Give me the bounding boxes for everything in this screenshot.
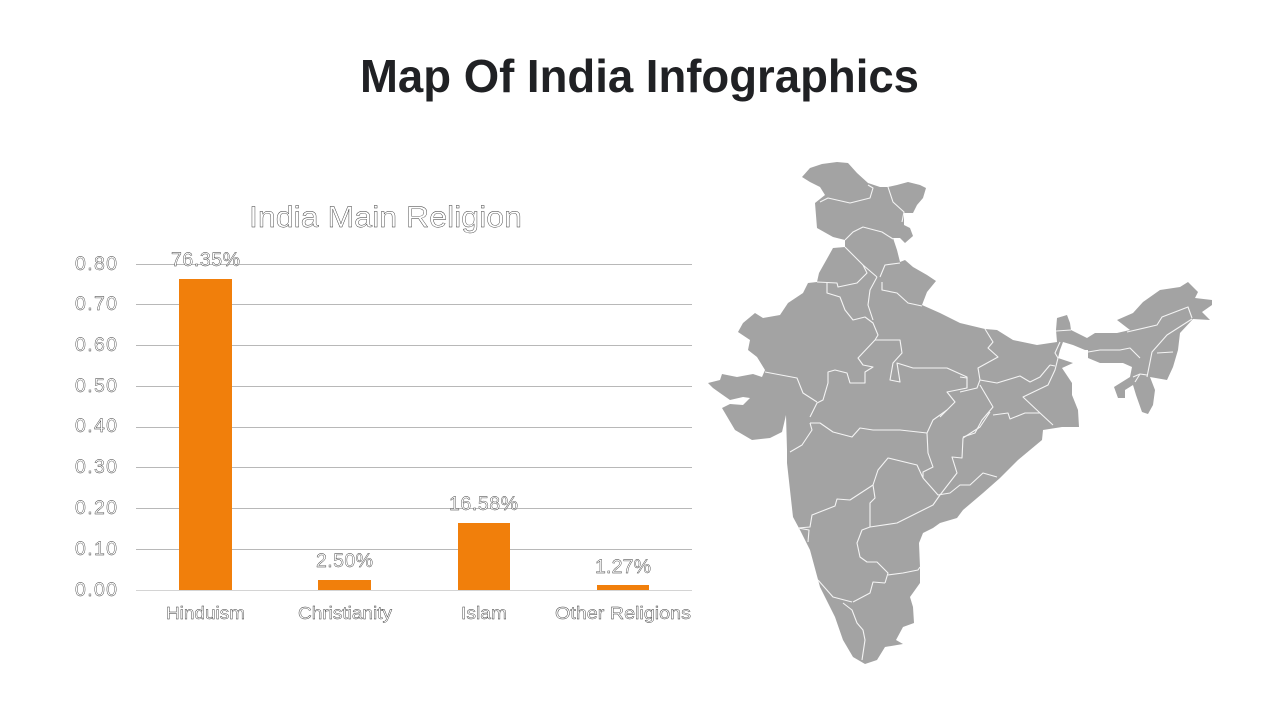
y axis labels: 0.40 bbox=[75, 415, 117, 437]
category labels: Islam bbox=[461, 603, 507, 623]
y axis labels: 0.20 bbox=[75, 497, 117, 519]
title: Map Of India Infographics bbox=[360, 50, 919, 102]
value labels bbox=[171, 249, 651, 578]
bars bbox=[179, 279, 649, 590]
value labels: 76.35% bbox=[171, 249, 240, 271]
chart title: India Main Religion bbox=[249, 201, 522, 234]
y axis labels: 0.70 bbox=[75, 293, 117, 315]
map landmass bbox=[708, 162, 1212, 664]
y axis labels: 0.80 bbox=[75, 253, 117, 275]
bar chart: India Main Religion bbox=[75, 201, 692, 623]
value labels: 2.50% bbox=[316, 550, 373, 572]
y axis labels: 0.50 bbox=[75, 375, 117, 397]
india map bbox=[708, 162, 1212, 664]
y axis labels: 0.00 bbox=[75, 579, 117, 601]
y axis labels: 0.10 bbox=[75, 538, 117, 560]
category labels: Hinduism bbox=[166, 603, 245, 623]
value labels: 1.27% bbox=[595, 556, 651, 578]
state borders bbox=[765, 185, 1192, 660]
y axis labels: 0.30 bbox=[75, 456, 117, 478]
category labels: Other Religions bbox=[555, 603, 691, 623]
y axis labels: 0.60 bbox=[75, 334, 117, 356]
category labels: Christianity bbox=[298, 603, 392, 623]
gridlines bbox=[136, 264, 692, 590]
category labels bbox=[166, 603, 691, 623]
value labels: 16.58% bbox=[449, 493, 518, 515]
y axis labels bbox=[75, 253, 117, 601]
